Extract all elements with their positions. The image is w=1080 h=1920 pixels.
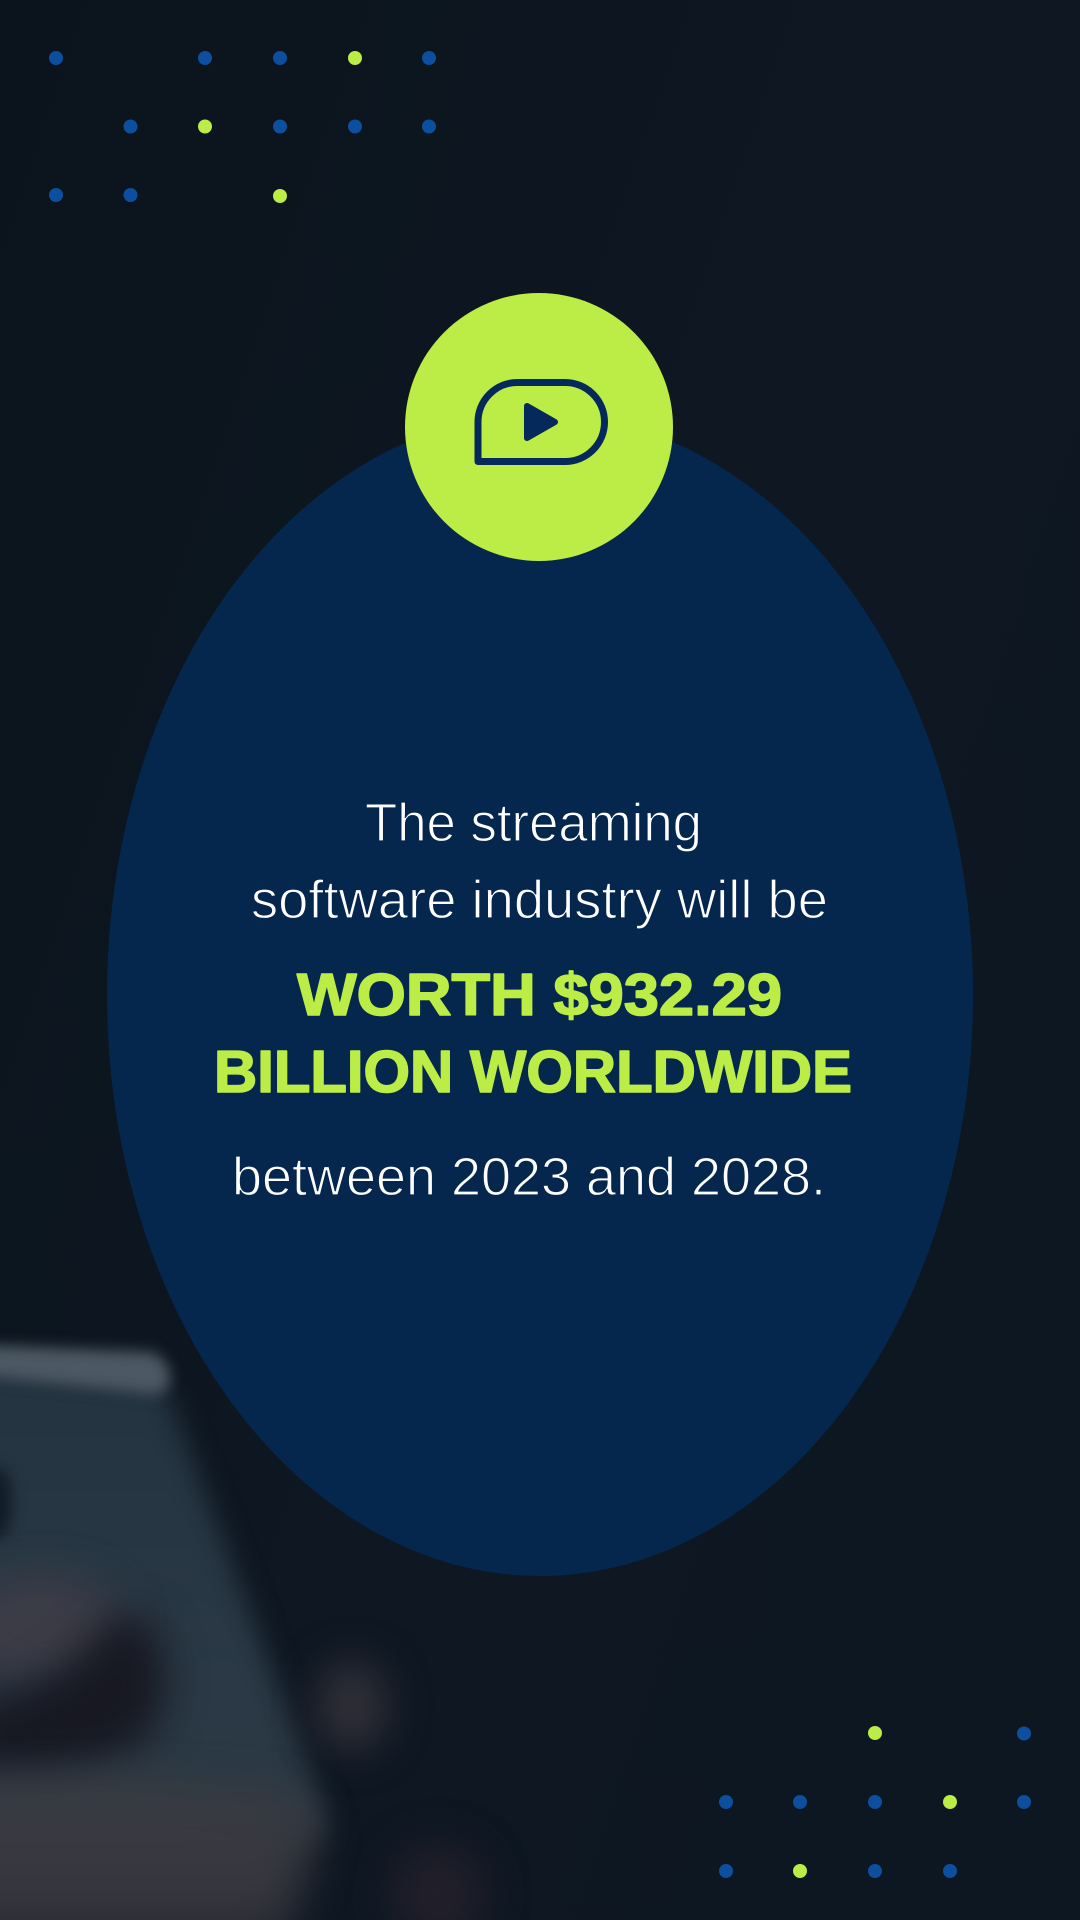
statement text [214, 793, 852, 1207]
blurred photo: hand holding phone [0, 1343, 486, 1920]
badge circle [405, 293, 673, 561]
icon: play speech bubble [478, 382, 604, 462]
text: closing line: between 2023 and 2028. [232, 1147, 826, 1207]
icon badge [405, 293, 673, 561]
dot grid: top left [49, 51, 436, 203]
highlight line 2: BILLION WORLDWIDE [214, 1039, 852, 1105]
text: intro line 1: The streaming [365, 793, 702, 853]
text: intro line 2: software industry will be [251, 870, 828, 930]
highlight line 1: WORTH $932.29 [297, 962, 782, 1028]
panel: oval background [107, 414, 973, 1576]
dot grid: bottom right [719, 1726, 1031, 1878]
